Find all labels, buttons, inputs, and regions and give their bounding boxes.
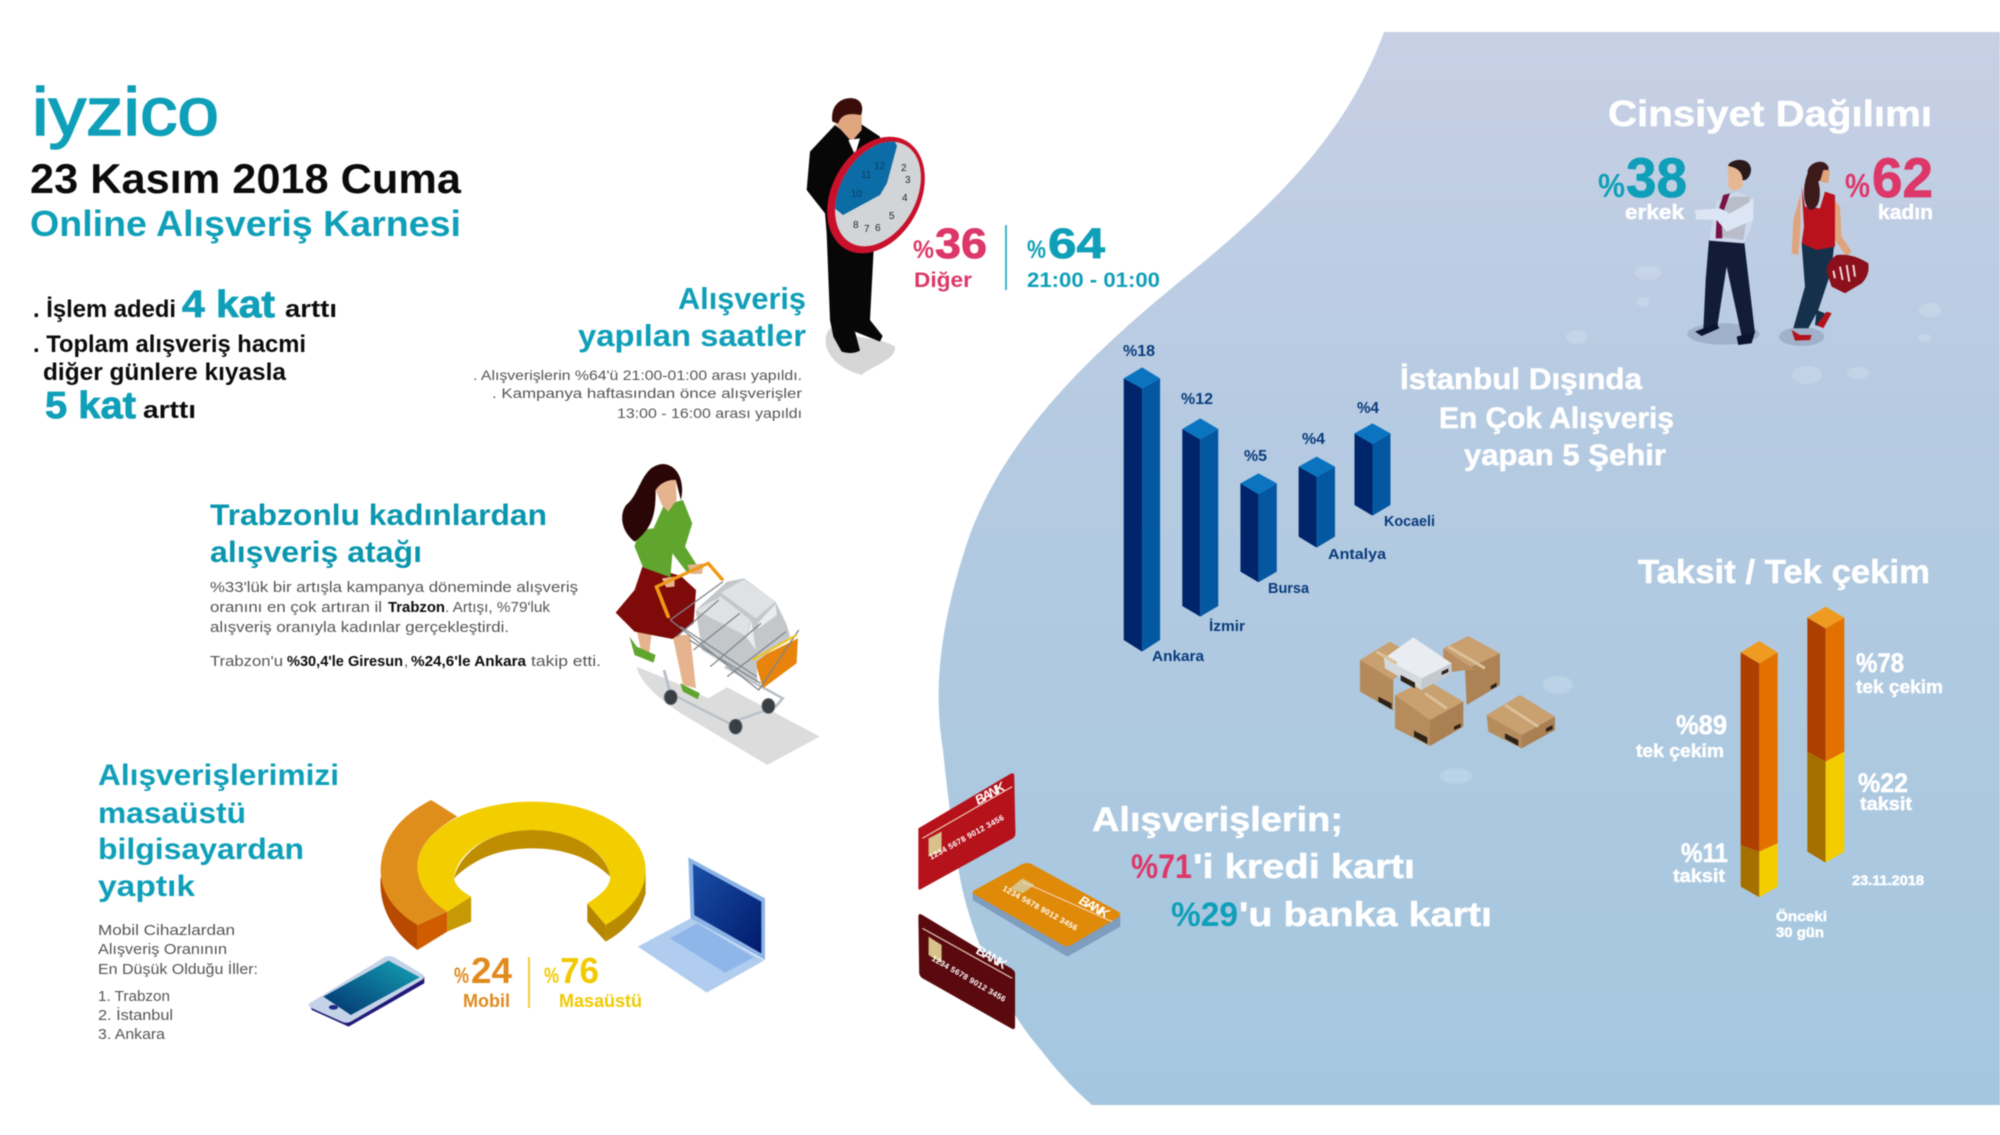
icon: credit cards: 1234 5678 9012 3456 <box>930 954 1008 1004</box>
key facts text block: 4 kat <box>182 284 275 326</box>
bar chart: top 5 cities: %4 <box>1357 400 1379 417</box>
icon: credit cards: BANK <box>972 778 1009 808</box>
panel: Trabzon text: Trabzon'u <box>210 654 283 670</box>
clock: 8 <box>853 220 859 231</box>
panel: installment vs single payment: %89 <box>1676 710 1727 740</box>
clock: 3 <box>905 175 911 186</box>
panel: shopping hours text <box>473 281 806 421</box>
heading: top cities <box>1400 363 1674 472</box>
key facts text block: 5 kat <box>45 385 136 427</box>
stat: %76 Masaüstü <box>544 950 642 1011</box>
panel: installment vs single payment: tek çekim <box>1636 741 1724 761</box>
key facts text block: arttı <box>285 296 337 323</box>
panel: Trabzon text: Trabzonlu kadınlardan <box>210 499 547 532</box>
panel: desktop shopping text <box>98 759 339 1043</box>
panel: installment vs single payment: 23.11.2018 <box>1852 872 1924 888</box>
bar chart: top 5 cities: Ankara <box>1152 648 1205 665</box>
bar chart: top 5 cities <box>1123 343 1435 665</box>
panel: shopping hours text: . Kampanya haftasından önce alışverişler <box>492 385 802 401</box>
panel: Trabzon text: oranını en çok artıran il <box>210 600 382 616</box>
title: date: 23 Kasım 2018 Cuma <box>30 155 462 202</box>
bar chart: top 5 cities: Antalya <box>1328 546 1387 563</box>
subtitle: Online Alışveriş Karnesi <box>30 203 461 244</box>
stat: men 38 percent: % <box>1598 167 1625 204</box>
panel: Trabzon text: Trabzon <box>388 600 445 616</box>
panel: installment vs single payment: Önceki <box>1776 908 1827 924</box>
panel: desktop shopping text: Mobil Cihazlardan <box>98 922 235 939</box>
icon: credit cards: 1234 5678 9012 3456 <box>928 813 1006 862</box>
stat: %24 Mobil: % <box>454 963 469 988</box>
panel: installment vs single payment: 30 gün <box>1776 924 1824 940</box>
panel: shopping hours text: yapılan saatler <box>578 318 806 353</box>
header block <box>30 74 462 244</box>
clock: 7 <box>864 224 870 235</box>
stat: %24 Mobil <box>454 950 512 1011</box>
panel: desktop shopping text: yaptık <box>98 870 195 903</box>
bar chart: top 5 cities: Bursa <box>1268 580 1310 597</box>
stat: %76 Masaüstü: % <box>544 963 559 988</box>
icon: man <box>1687 160 1759 345</box>
panel: card payment text: Alışverişlerin; <box>1092 801 1343 839</box>
bar chart: stacked bars <box>1741 607 1844 897</box>
panel: Trabzon text: %30,4'le Giresun <box>287 654 403 670</box>
panel: Trabzon text: %24,6'le Ankara <box>411 654 527 670</box>
icon: credit cards: BANK <box>974 943 1010 972</box>
clock <box>826 136 926 254</box>
panel: card payment text: %29 <box>1171 896 1238 934</box>
panel: installment vs single payment: tek çekim <box>1856 677 1943 697</box>
bar chart: top 5 cities: %5 <box>1244 448 1267 465</box>
icon: man holding clock <box>806 97 926 376</box>
key facts text block <box>33 284 337 427</box>
panel: desktop shopping text: 1. Trabzon <box>98 988 170 1005</box>
stat: men 38 percent: 38 <box>1626 146 1687 209</box>
clock: 6 <box>875 223 881 234</box>
panel: card payment text <box>1092 801 1492 934</box>
key facts text block: . Toplam alışveriş hacmi <box>33 331 306 358</box>
stat: women 62 percent: % <box>1845 167 1870 204</box>
stat: %64 21:00 - 01:00 <box>1027 220 1160 292</box>
stat: women 62 percent: kadın <box>1878 202 1933 224</box>
key facts text block: diğer günlere kıyasla <box>43 359 287 386</box>
clock: 5 <box>889 211 895 222</box>
bar chart: top 5 cities: %12 <box>1181 391 1213 408</box>
heading: top cities: İstanbul Dışında <box>1400 363 1642 396</box>
decorative clouds <box>1440 266 1941 784</box>
stat: men 38 percent: erkek <box>1625 202 1685 224</box>
stat: %76 Masaüstü: Masaüstü <box>559 991 642 1011</box>
panel: gender distribution <box>1598 93 1933 346</box>
clock: 2 <box>901 163 907 174</box>
panel: desktop shopping text: bilgisayardan <box>98 833 304 866</box>
stat: men 38 percent <box>1598 146 1687 224</box>
heading: top cities: En Çok Alışveriş <box>1439 402 1674 435</box>
panel: card payment text: 'u banka kartı <box>1239 896 1492 934</box>
icon: woman pushing shopping cart <box>616 464 820 765</box>
key facts text block: . İşlem adedi <box>33 296 176 323</box>
panel: installment vs single payment: %22 <box>1858 768 1908 798</box>
panel: shopping hours text: Alışveriş <box>678 281 806 316</box>
icon: laptop <box>638 857 765 993</box>
stat: %36 Diğer: Diğer <box>914 269 972 292</box>
icon: parcel boxes <box>1360 636 1555 748</box>
stat: women 62 percent <box>1845 146 1933 224</box>
panel: Trabzon text: . Artışı, %79'luk <box>445 600 551 616</box>
stat: %64 21:00 - 01:00: 64 <box>1048 220 1105 268</box>
stat: %36 Diğer: 36 <box>935 220 987 268</box>
panel: installment vs single payment <box>1636 553 1943 940</box>
panel: desktop shopping text: masaüstü <box>98 797 246 830</box>
stat: %24 Mobil: Mobil <box>463 991 510 1011</box>
panel: Trabzon text: alışveriş atağı <box>210 536 422 569</box>
panel: installment vs single payment: %78 <box>1856 648 1904 678</box>
clock: 10 <box>851 189 863 200</box>
icon: smartphone <box>309 956 424 1027</box>
stat: %36 Diğer <box>913 220 987 292</box>
panel: shopping hours text: 13:00 - 16:00 arası yapıldı <box>617 405 802 421</box>
bar chart: top 5 cities: Kocaeli <box>1384 513 1435 530</box>
panel: Trabzon text: alışveriş oranıyla kadınlar gerçekleştirdi. <box>210 620 509 636</box>
heading: Cinsiyet Dağılımı <box>1608 93 1932 134</box>
blue background shape <box>939 32 2000 1105</box>
bar chart: top 5 cities: %4 <box>1302 431 1325 448</box>
panel: Trabzon text <box>210 499 601 670</box>
stat: %76 Masaüstü: 76 <box>560 950 599 991</box>
icon: credit cards: 1234 5678 9012 3456 <box>1001 884 1079 933</box>
panel: installment vs single payment: taksit <box>1860 794 1912 814</box>
panel: Trabzon text: takip etti. <box>531 654 601 670</box>
bar chart: top 5 cities: %18 <box>1123 343 1155 360</box>
panel: desktop shopping text: 2. İstanbul <box>98 1006 173 1024</box>
panel: card payment text: 'i kredi kartı <box>1193 848 1415 886</box>
panel: desktop shopping text: Alışverişlerimizi <box>98 759 339 792</box>
bar chart: top 5 cities: İzmir <box>1209 618 1245 635</box>
stat: %64 21:00 - 01:00: 21:00 - 01:00 <box>1027 269 1160 292</box>
icon: credit cards: BANK <box>1077 893 1113 922</box>
logo: iyzico: iyzico <box>32 74 219 150</box>
panel: desktop shopping text: Alışveriş Oranının <box>98 941 227 958</box>
heading: top cities: yapan 5 Şehir <box>1464 439 1666 472</box>
stat: %64 21:00 - 01:00: % <box>1027 236 1046 264</box>
stat: women 62 percent: 62 <box>1872 146 1933 209</box>
clock: 4 <box>902 193 908 204</box>
stat: %36 Diğer: % <box>913 236 934 264</box>
panel: desktop shopping text: En Düşük Olduğu İller: <box>98 960 258 978</box>
clock: 12 <box>874 161 886 172</box>
panel: card payment text: %71 <box>1131 848 1192 886</box>
heading: Taksit / Tek çekim <box>1638 553 1930 590</box>
chart: 3D donut mobile vs desktop <box>380 800 646 950</box>
icon: woman with basket <box>1779 162 1869 346</box>
icon: credit cards <box>918 773 1120 1029</box>
panel: Trabzon text: , <box>404 654 408 670</box>
stat: %24 Mobil: 24 <box>471 950 512 991</box>
panel: desktop shopping text: 3. Ankara <box>98 1026 166 1043</box>
panel: installment vs single payment: taksit <box>1673 866 1725 886</box>
panel: Trabzon text: %33'lük bir artışla kampanya döneminde alışveriş <box>210 580 578 596</box>
panel: installment vs single payment: %11 <box>1681 838 1728 868</box>
clock: 11 <box>861 170 872 181</box>
key facts text block: arttı <box>143 397 196 424</box>
panel: shopping hours text: . Alışverişlerin %64'ü 21:00-01:00 arası yapıldı. <box>473 367 802 383</box>
